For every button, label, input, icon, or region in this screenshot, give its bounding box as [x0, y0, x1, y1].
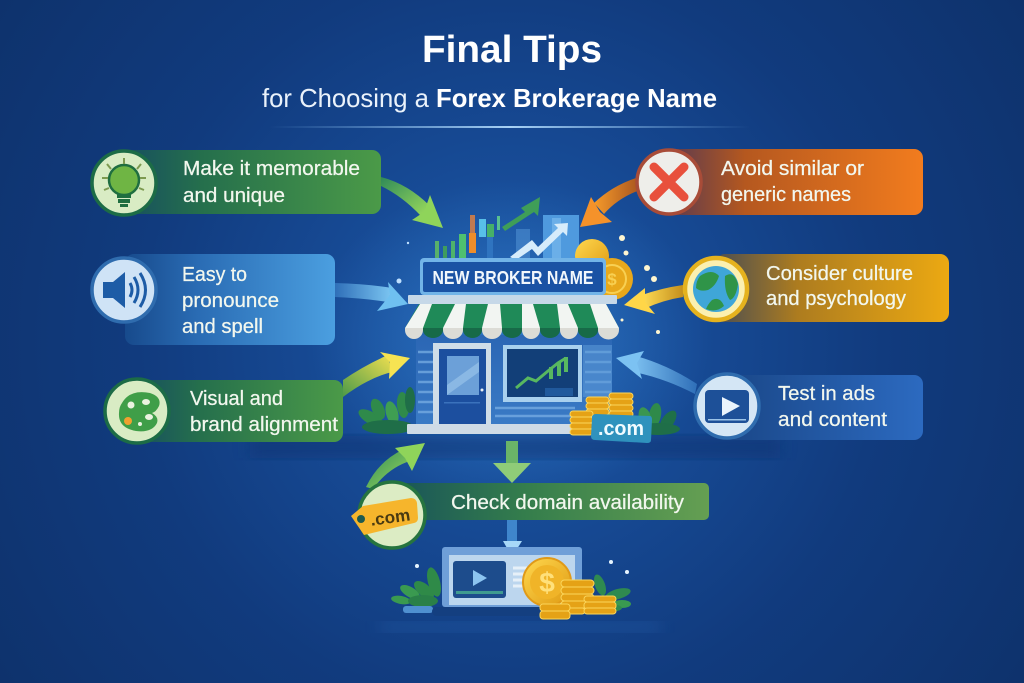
panel: make it memorable: [92, 150, 381, 215]
leaves right: [592, 573, 632, 612]
panel: check domain availability: [351, 482, 709, 548]
panel: avoid similar names: [637, 149, 923, 215]
leaves left: [390, 566, 444, 613]
label bar: [727, 375, 923, 440]
icon: .com price tag: [351, 482, 425, 548]
icon: video screen: [695, 374, 759, 438]
panel: consider culture: Consider culture: [766, 263, 913, 285]
coin stacks: [570, 393, 633, 435]
arrow: pronounce to shop: [335, 282, 408, 311]
.com tag: .com: [598, 418, 644, 440]
icon: palette: [105, 379, 169, 443]
panel: test in ads: and content: [778, 409, 887, 431]
rising chart behind the shop: [435, 197, 579, 260]
large dollar coin: [523, 558, 571, 606]
laptop with coins illustration: [390, 547, 632, 619]
arrow: test in ads to shop: [616, 351, 697, 394]
panel: avoid similar names: generic names: [721, 184, 851, 206]
label bar: [137, 380, 343, 442]
gold coins behind the sign: $: [607, 270, 617, 289]
arrow: domain check up to shop: [366, 443, 425, 489]
title: Final Tips: [422, 29, 602, 71]
panel: make it memorable: and unique: [183, 185, 285, 207]
icon: speaker: [92, 258, 156, 322]
label bar: [669, 149, 923, 215]
panel: easy to pronounce: pronounce: [182, 290, 279, 312]
arrow: domain bar down to laptop: [503, 520, 522, 557]
large dollar coin: $: [539, 567, 555, 598]
panel: visual and brand alignment: brand alignment: [190, 414, 338, 436]
gold coins behind the sign: [575, 239, 633, 300]
icon: light bulb: [92, 151, 156, 215]
panel: consider culture: and psychology: [766, 288, 906, 310]
.com tag: [591, 414, 652, 443]
shop base step: [407, 424, 572, 434]
panel: test in ads: [695, 374, 923, 440]
laptop screen: [442, 547, 582, 607]
panel: easy to pronounce: and spell: [182, 316, 263, 338]
label bar: [716, 254, 949, 322]
panel: test in ads: Test in ads: [778, 383, 875, 405]
panel: easy to pronounce: Easy to: [182, 264, 247, 286]
central storefront illustration: [356, 197, 680, 443]
bushes beside the shop: [356, 387, 680, 435]
panel: easy to pronounce: [92, 254, 335, 345]
roof ledge: [408, 295, 617, 304]
icon: globe: [685, 258, 747, 320]
awning: [405, 304, 619, 339]
arrow: visual to shop: [343, 352, 410, 397]
panel: visual and brand alignment: [105, 379, 343, 443]
panel: make it memorable: Make it memorable: [183, 158, 360, 180]
icon: .com price tag: .com: [369, 505, 411, 530]
arrow: memorable to shop: [381, 177, 443, 228]
sign board: NEW BROKER NAME: [432, 268, 594, 288]
shop building: [416, 335, 612, 427]
label bar: [125, 150, 381, 214]
small coin stacks: [540, 580, 616, 619]
shop window with chart: [503, 345, 582, 402]
label bar: [125, 254, 335, 345]
sparkles: [415, 560, 629, 574]
icon: red cross: [637, 150, 701, 214]
sparkles: [396, 235, 660, 334]
panel: consider culture: [685, 254, 949, 322]
panel: avoid similar names: Avoid similar or: [721, 158, 864, 180]
door: [433, 343, 491, 426]
subtitle: for Choosing a Forex Brokerage Name: [262, 83, 717, 113]
arrow: avoid generic to shop: [580, 178, 640, 227]
label bar: [400, 483, 709, 520]
laptop base: [432, 607, 542, 616]
panel: check domain availability: Check domain availability: [451, 492, 684, 514]
sign board: [420, 258, 606, 295]
panel: visual and brand alignment: Visual and: [190, 388, 283, 410]
arrow: shop down to domain bar: [493, 441, 531, 483]
arrow: culture to shop: [624, 285, 683, 314]
